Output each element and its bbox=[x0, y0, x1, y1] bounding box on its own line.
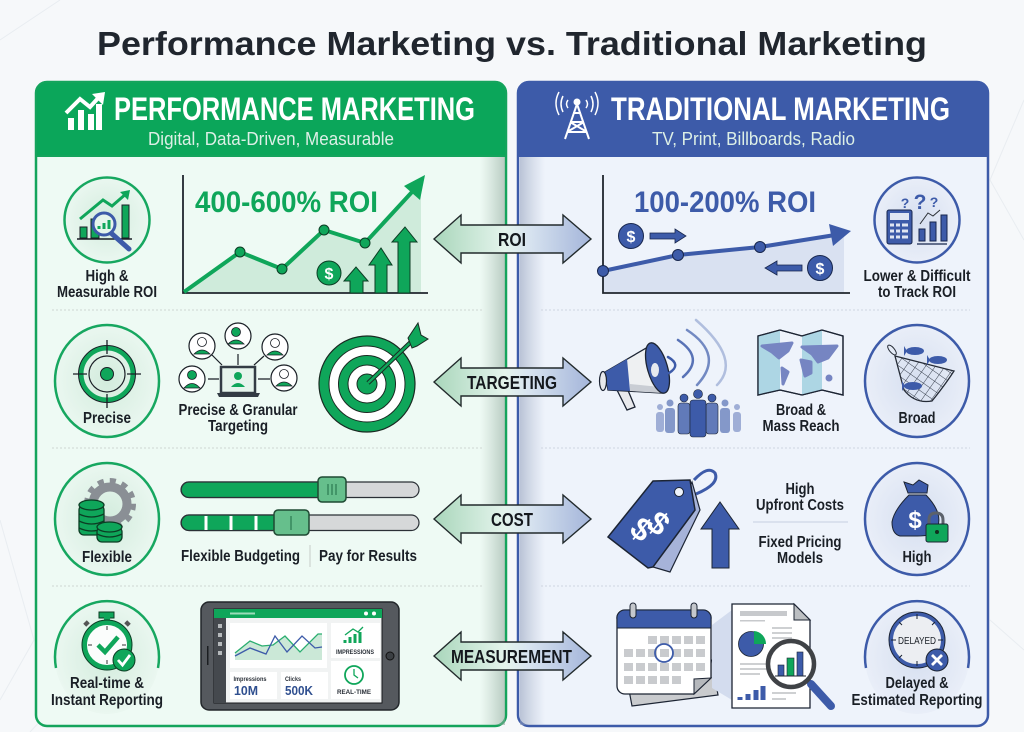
header title: TRADITIONAL MARKETING bbox=[611, 91, 950, 127]
map label bbox=[762, 402, 840, 435]
icon: price tags: $ bbox=[640, 504, 677, 543]
arrow: measurement comparison bbox=[434, 632, 591, 680]
targeting label: Precise bbox=[83, 410, 131, 427]
tablet dashboard: Impressions bbox=[234, 676, 267, 683]
budget labels: Flexible Budgeting bbox=[181, 548, 300, 565]
ROI label: Measurable ROI bbox=[57, 284, 157, 301]
icon: bullseye bbox=[319, 323, 428, 432]
arrow: ROI comparison: ROI bbox=[498, 230, 526, 250]
arrow: targeting comparison: TARGETING bbox=[467, 373, 557, 393]
ROI chart: rising line: $ bbox=[325, 266, 334, 283]
cost labels bbox=[753, 481, 848, 567]
icon: delayed clock bbox=[865, 601, 969, 714]
header title: PERFORMANCE MARKETING bbox=[114, 91, 475, 127]
header subtitle: TV, Print, Billboards, Radio bbox=[652, 129, 855, 149]
icon: fishing net bbox=[865, 325, 969, 437]
ROI icon bbox=[874, 178, 960, 262]
cost labels: High bbox=[786, 481, 814, 498]
delayed label bbox=[852, 675, 982, 709]
tablet dashboard: 500K bbox=[285, 683, 314, 698]
icon: price tags: $ bbox=[623, 510, 660, 549]
header icon: radio tower bbox=[556, 92, 598, 139]
ROI chart: rising line bbox=[183, 175, 428, 293]
tablet dashboard: Clicks bbox=[285, 676, 301, 683]
cost label: Flexible bbox=[82, 549, 132, 566]
cost icon bbox=[55, 463, 159, 575]
icon: megaphone with crowd bbox=[600, 320, 741, 437]
budget labels bbox=[181, 545, 417, 567]
tablet dashboard: IMPRESSIONS bbox=[336, 649, 375, 656]
broad label: Broad bbox=[898, 410, 936, 427]
network label bbox=[178, 402, 298, 435]
ROI chart: flat line: $ bbox=[816, 261, 825, 278]
ROI icon: ? bbox=[914, 191, 926, 214]
arrow: cost comparison bbox=[434, 495, 591, 543]
icon: world map bbox=[758, 330, 843, 395]
delayed label: Delayed & bbox=[886, 675, 948, 692]
title: Performance Marketing vs. Traditional Marketing bbox=[97, 25, 927, 62]
ROI icon bbox=[64, 178, 150, 262]
icon: up arrow bbox=[701, 502, 739, 568]
icon: calendar bbox=[617, 603, 718, 706]
tablet dashboard: REAL-TIME bbox=[337, 689, 372, 696]
measurement label: Real-time & bbox=[70, 675, 144, 692]
network label: Precise & Granular bbox=[178, 402, 298, 419]
cost labels: Upfront Costs bbox=[756, 497, 844, 514]
ROI icon: ? bbox=[901, 195, 909, 211]
ROI icon: ? bbox=[930, 194, 938, 210]
panel: traditional marketing bbox=[518, 82, 988, 726]
arrow: ROI comparison bbox=[434, 215, 591, 263]
budget sliders bbox=[181, 477, 419, 535]
arrow: measurement comparison: MEASUREMENT bbox=[451, 647, 572, 667]
ROI value: 400-600% ROI bbox=[195, 186, 378, 219]
arrow: targeting comparison bbox=[434, 358, 591, 406]
icon: money bag: $ bbox=[908, 507, 922, 534]
measurement icon bbox=[55, 601, 159, 714]
tablet dashboard: 10M bbox=[234, 683, 258, 698]
ROI value: 100-200% ROI bbox=[634, 186, 816, 219]
high label: High bbox=[902, 549, 932, 566]
delayed label: Estimated Reporting bbox=[852, 692, 982, 709]
cost labels: Fixed Pricing bbox=[758, 534, 842, 551]
ROI label: to Track ROI bbox=[878, 284, 956, 301]
icon: delayed clock: DELAYED bbox=[898, 636, 936, 647]
map label: Mass Reach bbox=[762, 418, 840, 435]
ROI label: High & bbox=[86, 268, 128, 285]
cost labels: Models bbox=[777, 550, 823, 567]
icon: price tags bbox=[608, 470, 716, 572]
audience network bbox=[179, 323, 297, 397]
budget labels: Pay for Results bbox=[319, 548, 417, 565]
measurement label: Instant Reporting bbox=[51, 692, 163, 709]
ROI label bbox=[57, 268, 157, 301]
panel: performance marketing bbox=[36, 82, 506, 726]
ROI chart: flat line: $ bbox=[627, 229, 636, 246]
tablet dashboard bbox=[201, 602, 399, 710]
ROI label: Lower & Difficult bbox=[864, 268, 970, 285]
measurement label bbox=[51, 675, 163, 709]
icon: report with magnifier bbox=[712, 604, 831, 708]
header icon: growth chart bbox=[66, 92, 105, 130]
ROI chart: flat line bbox=[598, 175, 851, 293]
map label: Broad & bbox=[776, 402, 826, 419]
ROI label bbox=[864, 268, 970, 301]
arrow: cost comparison: COST bbox=[491, 510, 533, 530]
network label: Targeting bbox=[208, 418, 268, 435]
targeting icon bbox=[55, 325, 159, 437]
header subtitle: Digital, Data-Driven, Measurable bbox=[148, 129, 394, 149]
icon: money bag bbox=[865, 463, 969, 575]
